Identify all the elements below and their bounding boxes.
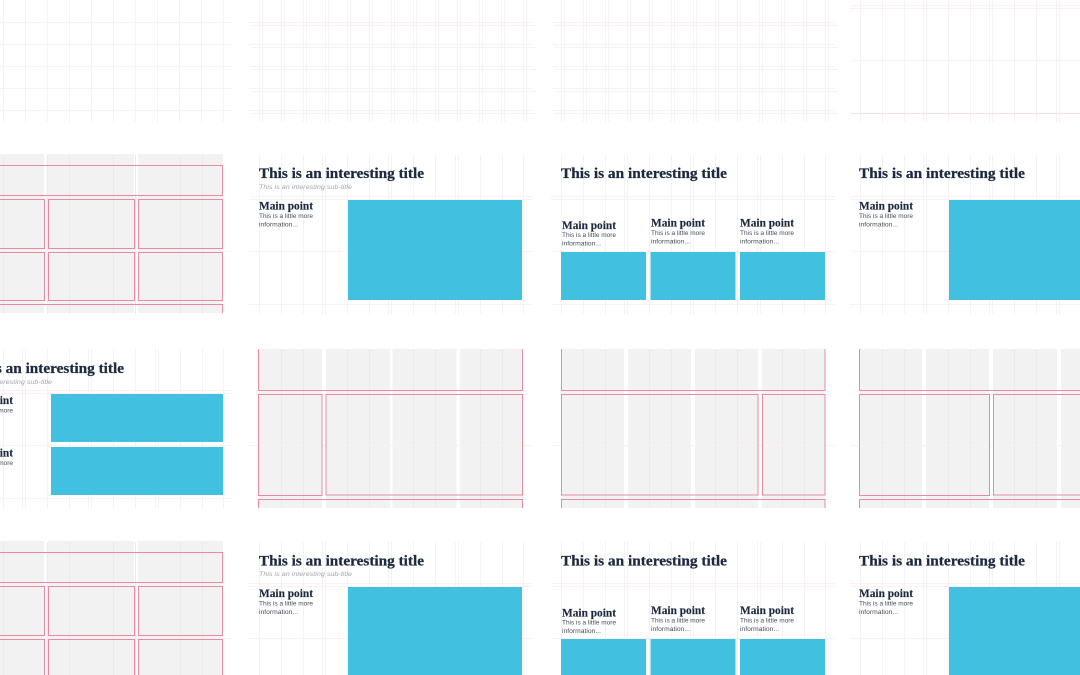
panel: grey wireframe narrow-right, third row, slide 3 <box>551 349 835 508</box>
main point text: This is a little more <box>259 213 313 220</box>
title: This is an interesting title <box>561 554 727 570</box>
main point text: Main point <box>259 588 313 600</box>
column 1: This is a little more <box>562 620 616 626</box>
column 3 <box>740 605 825 675</box>
main point text: information... <box>259 609 298 616</box>
main point text: information... <box>259 222 298 228</box>
title: This is an interesting title <box>259 166 424 182</box>
column 1: Main point <box>562 608 616 620</box>
column 2: information... <box>651 626 690 633</box>
panel: grey wireframe, second row, slide 1 <box>0 154 233 314</box>
column 1: information... <box>562 240 601 248</box>
main point text <box>259 588 313 616</box>
blue content block <box>949 587 1080 675</box>
main point text: information... <box>859 609 898 616</box>
column 2: Main point <box>651 605 705 617</box>
panel: two stacked main points, third row, slide 1 <box>0 349 233 508</box>
panel: sparse grid, top row, slide 4 <box>850 0 1080 123</box>
column 1: This is a little more <box>562 232 616 239</box>
blue content block <box>348 587 522 675</box>
panel: title with one main point and large block, second row, slide 2 <box>249 155 533 314</box>
sub-title: This is an interesting sub-title <box>259 184 352 191</box>
column 3 <box>740 218 825 300</box>
blue block one <box>51 394 223 442</box>
main point text: information... <box>859 222 898 228</box>
main point two <box>0 448 13 467</box>
column 2: Main point <box>651 218 705 230</box>
column 1 <box>561 608 646 675</box>
title: This is an interesting title <box>859 166 1025 182</box>
column 3: This is a little more <box>740 618 794 624</box>
column 2 <box>650 605 736 675</box>
column 2: This is a little more <box>651 618 705 624</box>
panel: column grid, top row, slide 3 <box>551 0 838 126</box>
title: This is an interesting title <box>259 554 424 570</box>
panel: grey wireframe, bottom row, slide 1 <box>0 541 233 675</box>
main point text: This is a little more <box>859 213 913 220</box>
blue content block <box>348 200 522 300</box>
panel: title with three main points, second row, slide 3 <box>551 155 835 314</box>
main point text: Main point <box>859 588 913 600</box>
panel: title with one main point and large block, second row, slide 4 <box>850 155 1080 314</box>
column 2: This is a little more <box>651 230 705 237</box>
column 2: information... <box>651 238 690 246</box>
main point text: This is a little more <box>259 600 313 608</box>
column 3: Main point <box>740 218 794 230</box>
main point text: Main point <box>259 200 313 212</box>
panel: grey wireframe half split, third row, slide 4 <box>850 349 1080 508</box>
main point text: Main point <box>859 200 913 212</box>
main point text <box>859 200 913 228</box>
panel: title with one main point and large block, bottom row, slide 4 <box>850 542 1080 675</box>
main point text <box>859 588 913 616</box>
panel: grey wireframe narrow-left, third row, slide 2 <box>249 349 533 508</box>
blue content block <box>949 200 1080 300</box>
column 3: Main point <box>740 605 794 617</box>
main point text <box>259 200 313 228</box>
title: This is an interesting title <box>859 554 1025 570</box>
panel: title with one main point and large block, bottom row, slide 2 <box>249 542 533 675</box>
column 3: information... <box>740 626 779 633</box>
title: This is an interesting title <box>561 166 727 182</box>
panel: title with three main points, bottom row, slide 3 <box>551 542 835 675</box>
column 2 <box>650 218 736 300</box>
main point text: This is a little more <box>859 600 913 608</box>
panel: dense baseline grid, top row, slide 2 <box>249 0 536 126</box>
column 1: information... <box>562 628 601 635</box>
sub-title: This is an interesting sub-title <box>259 571 352 578</box>
main point one <box>0 395 13 414</box>
column 1: Main point <box>562 220 616 232</box>
column 3: This is a little more <box>740 230 794 237</box>
panel: empty column grid, top row, slide 1 <box>0 0 233 123</box>
column 1 <box>561 220 646 300</box>
column 3: information... <box>740 238 779 246</box>
blue block two <box>51 447 223 495</box>
